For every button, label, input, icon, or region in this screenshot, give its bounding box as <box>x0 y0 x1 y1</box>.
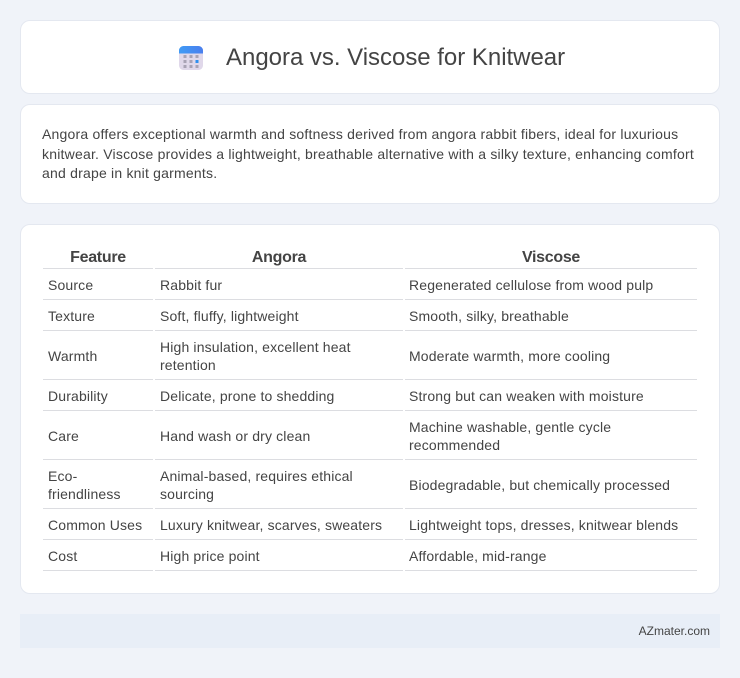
table header <box>70 249 580 266</box>
intro panel <box>20 104 720 204</box>
table header: Feature <box>70 249 126 266</box>
row: cost: Cost <box>48 548 77 564</box>
row: texture <box>48 308 569 324</box>
row: care: recommended <box>409 437 500 453</box>
row: eco-friendliness <box>48 468 670 502</box>
row: source: Source <box>48 277 93 293</box>
intro text: Angora offers exceptional warmth and softness derived from angora rabbit fibers, ideal for luxurious <box>42 126 678 142</box>
row: common uses <box>48 517 678 533</box>
comparison table panel <box>20 224 720 594</box>
row: durability: Durability <box>48 388 108 404</box>
icon: calendar <box>179 46 203 70</box>
row: texture: Texture <box>48 308 95 324</box>
row: warmth: retention <box>160 357 216 373</box>
row: care <box>48 419 611 453</box>
footer source text: AZmater.com <box>639 624 710 638</box>
row: cost: Affordable, mid-range <box>409 548 547 564</box>
row: common uses: Common Uses <box>48 517 142 533</box>
row: cost <box>48 548 547 564</box>
row: durability <box>48 388 644 404</box>
footer bar <box>20 614 720 648</box>
table header: Viscose <box>522 249 580 266</box>
row: texture: Smooth, silky, breathable <box>409 308 569 324</box>
row: eco-friendliness: Eco- <box>48 468 77 484</box>
header card <box>20 20 720 94</box>
row: warmth: High insulation, excellent heat <box>160 339 351 355</box>
intro text: and drape in knit garments. <box>42 165 217 181</box>
row: eco-friendliness: Animal-based, requires ethical <box>160 468 353 484</box>
row: eco-friendliness: Biodegradable, but chemically processed <box>409 477 670 493</box>
title: Angora vs. Viscose for Knitwear <box>226 44 565 71</box>
row: care: Hand wash or dry clean <box>160 428 310 444</box>
row: eco-friendliness: sourcing <box>160 486 214 502</box>
table header: Angora <box>252 249 306 266</box>
intro text <box>42 126 694 181</box>
row: source: Regenerated cellulose from wood pulp <box>409 277 653 293</box>
intro text: knitwear. Viscose provides a lightweight, breathable alternative with a silky texture, enhancing comfort <box>42 146 694 162</box>
row: cost: High price point <box>160 548 260 564</box>
row: durability: Delicate, prone to shedding <box>160 388 334 404</box>
row: warmth: Moderate warmth, more cooling <box>409 348 610 364</box>
row: common uses: Lightweight tops, dresses, knitwear blends <box>409 517 678 533</box>
row: texture: Soft, fluffy, lightweight <box>160 308 299 324</box>
row: common uses: Luxury knitwear, scarves, sweaters <box>160 517 382 533</box>
row: warmth: Warmth <box>48 348 97 364</box>
row: warmth <box>48 339 610 373</box>
row: eco-friendliness: friendliness <box>48 486 121 502</box>
row: durability: Strong but can weaken with moisture <box>409 388 644 404</box>
row: source <box>48 277 653 293</box>
row: care: Care <box>48 428 79 444</box>
row: source: Rabbit fur <box>160 277 222 293</box>
row: care: Machine washable, gentle cycle <box>409 419 611 435</box>
